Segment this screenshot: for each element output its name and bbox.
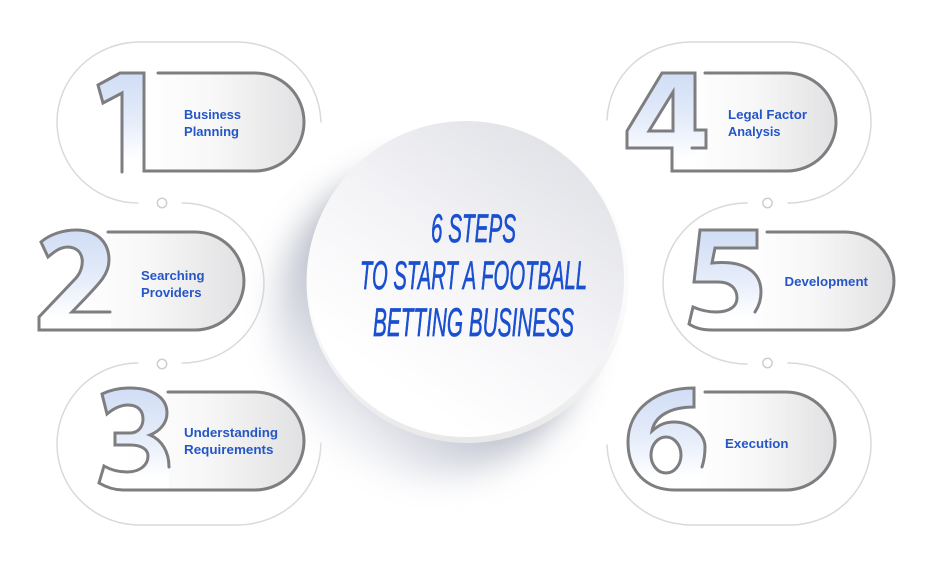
title: 6 STEPS — [431, 207, 516, 251]
title: TO START A FOOTBALL — [360, 254, 587, 298]
step 5: development: Development — [784, 274, 869, 289]
step 5: development — [689, 230, 894, 330]
step 3: understanding requirements: Requirements — [184, 442, 274, 457]
step 4: legal factor analysis — [627, 73, 836, 171]
step 3: understanding requirements — [99, 388, 304, 490]
step 4: legal factor analysis: Legal Factor — [728, 107, 807, 122]
title — [360, 207, 587, 345]
step 6: execution: Execution — [725, 436, 789, 451]
step 2: searching providers: Searching — [141, 268, 205, 283]
connector outlines and dots — [57, 42, 871, 525]
step 6: execution — [628, 388, 835, 490]
step 4: legal factor analysis: Analysis — [728, 124, 780, 139]
step 1: business planning: Business — [184, 107, 241, 122]
panel: central circle — [275, 121, 628, 477]
step 1: business planning: Planning — [184, 124, 239, 139]
step 1: business planning — [98, 73, 304, 172]
step 2: searching providers — [39, 230, 244, 330]
step 3: understanding requirements: Understanding — [184, 425, 278, 440]
title: BETTING BUSINESS — [373, 301, 574, 345]
step 2: searching providers: Providers — [141, 285, 202, 300]
